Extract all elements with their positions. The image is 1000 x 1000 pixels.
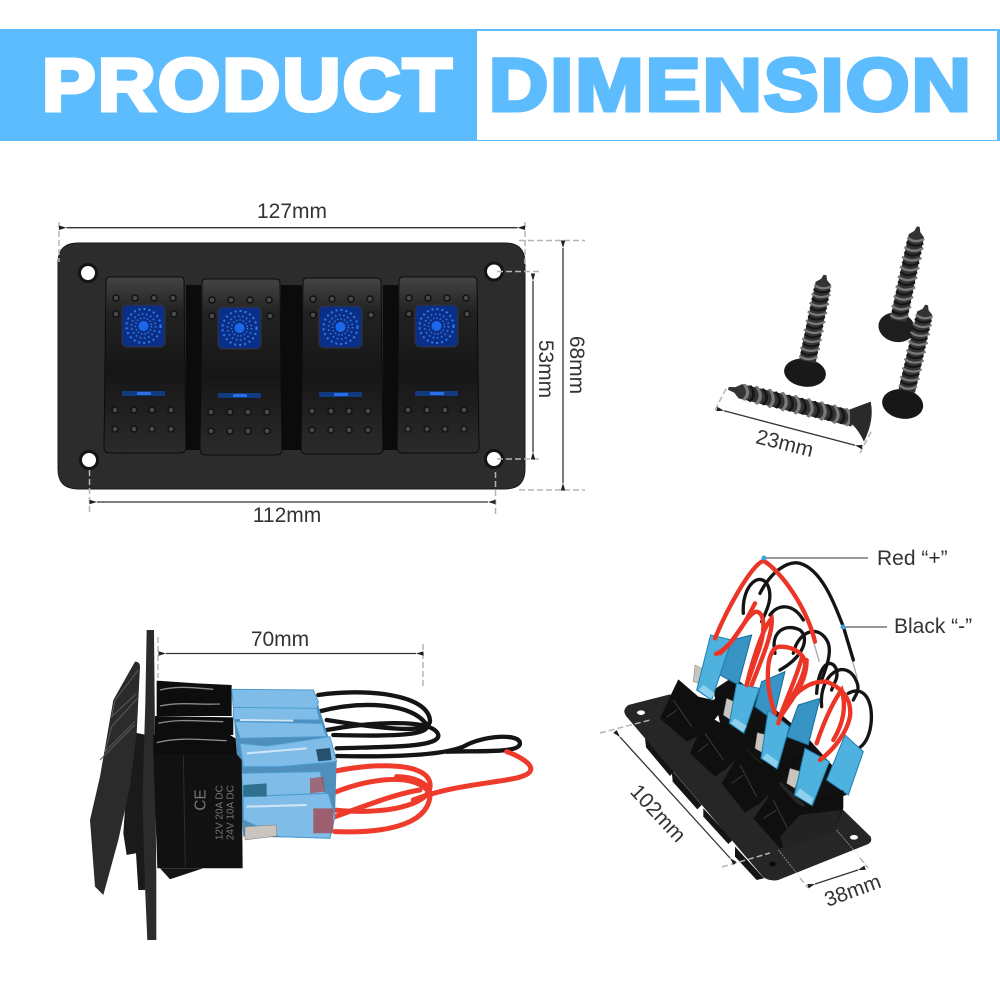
red wires	[715, 561, 815, 717]
bare wire tips	[814, 643, 857, 678]
callout: Red +	[762, 547, 948, 570]
heading: DIMENSION: DIMENSION	[489, 44, 973, 126]
angled plate	[624, 694, 871, 880]
rocker switch 2	[200, 279, 282, 455]
red wires	[323, 752, 531, 832]
black wires	[743, 563, 871, 750]
dimension: 38mm	[800, 858, 884, 912]
dimension: 70mm: 70mm	[251, 628, 309, 651]
dimension: 38mm: 38mm	[821, 870, 884, 912]
blue connectors	[232, 689, 337, 838]
callout: Black -	[840, 615, 972, 638]
front view panel with four rocker switches	[58, 243, 525, 489]
rating labels: 12V 20A DC	[215, 785, 226, 840]
plate measurement dashes	[778, 830, 866, 877]
dimension: 127mm	[59, 200, 525, 264]
mounting screws	[726, 225, 936, 442]
dimension: 102mm	[600, 720, 770, 867]
dimension: 70mm	[158, 628, 423, 686]
angled view of switch panel	[624, 561, 871, 880]
dimension: 23mm	[715, 387, 872, 462]
dimension: 53mm	[497, 272, 557, 459]
dark backing behind connectors	[713, 677, 847, 807]
mounting plate edge	[142, 630, 156, 940]
switch body side	[153, 754, 243, 868]
metal blades	[693, 665, 801, 788]
dimension: 112mm	[90, 470, 496, 527]
screw: middle	[782, 273, 834, 389]
dimension: 102mm: 102mm	[625, 780, 690, 847]
switch body highlights	[667, 700, 790, 833]
screw: lying flat	[726, 380, 872, 442]
mounting holes	[80, 263, 502, 468]
metal blade	[245, 825, 277, 840]
header banner	[0, 29, 1000, 141]
screw: back right	[876, 225, 928, 345]
front rocker opening	[780, 810, 842, 848]
rocker switch 1	[104, 277, 186, 453]
rocker switch 4	[397, 277, 479, 453]
dimension: 53mm: 53mm	[534, 340, 557, 398]
rocker frame behind the plate	[123, 732, 147, 890]
rockers tilted outwards	[90, 662, 140, 895]
dimension: 127mm: 127mm	[257, 200, 327, 223]
lower rocker bumps	[645, 737, 764, 880]
switch body tops	[153, 681, 241, 755]
callout: Red +: Red “+”	[877, 547, 948, 570]
switch bodies	[660, 679, 843, 848]
dimension: 23mm: 23mm	[753, 425, 816, 462]
back connectors	[720, 635, 863, 795]
callout: Black -: Black “-”	[894, 615, 972, 638]
black wires	[318, 692, 520, 756]
rating labels	[192, 785, 237, 840]
red wires, front loops	[778, 660, 850, 760]
dimension: 112mm: 112mm	[253, 504, 321, 527]
dimension: 68mm	[519, 240, 588, 490]
dimension: 68mm: 68mm	[565, 336, 588, 394]
rating labels: CE	[192, 789, 209, 811]
front connectors	[697, 635, 829, 806]
plate holes	[637, 710, 858, 866]
rating labels: 24V 10A DC	[226, 785, 237, 840]
heading: PRODUCT: PRODUCT	[42, 44, 454, 126]
rocker switch 3	[301, 278, 383, 454]
side view of switch panel with wires	[90, 630, 531, 940]
screw: front right	[880, 303, 936, 422]
